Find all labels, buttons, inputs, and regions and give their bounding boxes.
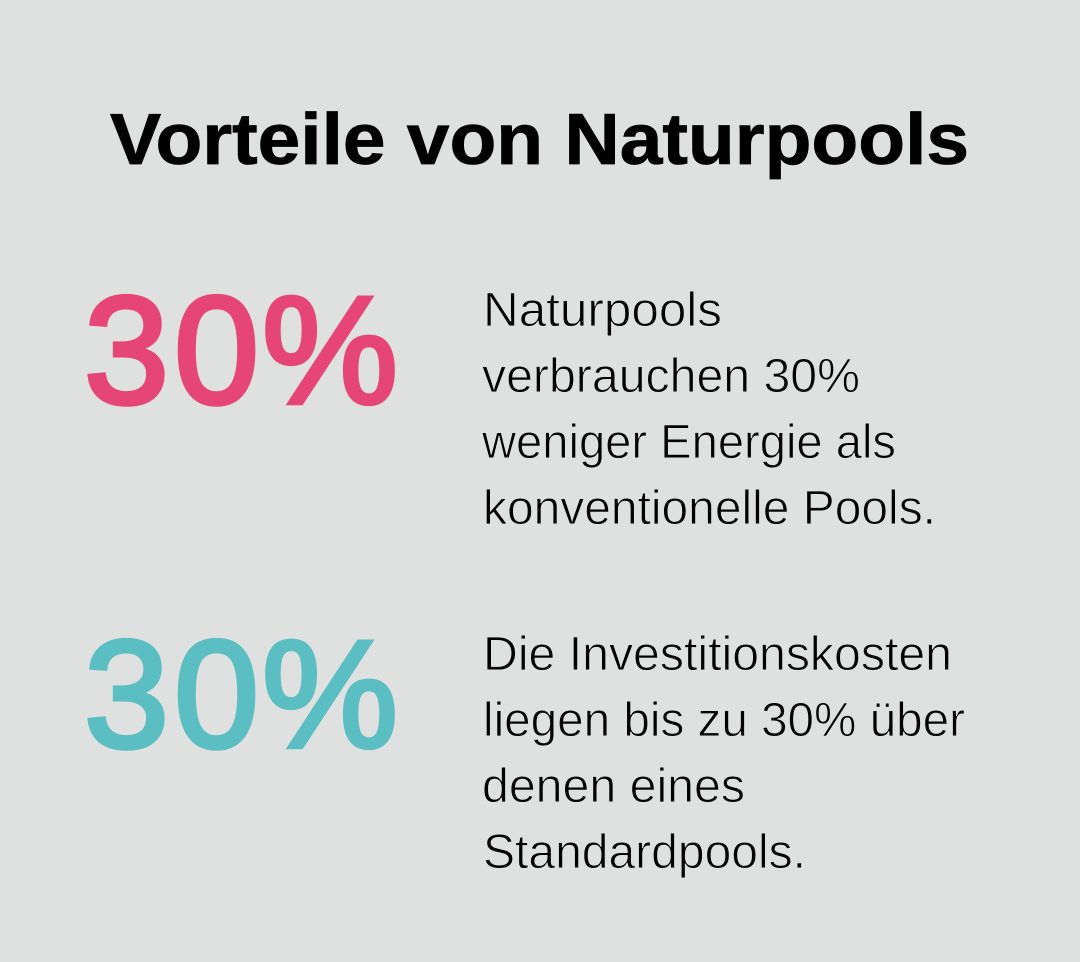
title: Vorteile von Naturpools: [110, 100, 969, 180]
stat 2: big number: 30%: [84, 609, 398, 780]
stat 1: description: verbrauchen 30%: [482, 350, 860, 403]
stat 1: description: weniger Energie als: [481, 416, 896, 469]
stat 1: description: [481, 284, 936, 535]
stat 2: description: [482, 628, 965, 879]
stat 2: description: Die Investitionskosten: [483, 628, 952, 681]
stat 2: description: liegen bis zu 30% über: [483, 694, 965, 747]
stat 1: description: konventionelle Pools.: [483, 482, 936, 535]
stat 2: description: denen eines: [482, 760, 745, 813]
stat 1: description: Naturpools: [483, 284, 722, 337]
stat 1: big number: 30%: [84, 265, 398, 436]
stat 2: description: Standardpools.: [483, 826, 806, 879]
